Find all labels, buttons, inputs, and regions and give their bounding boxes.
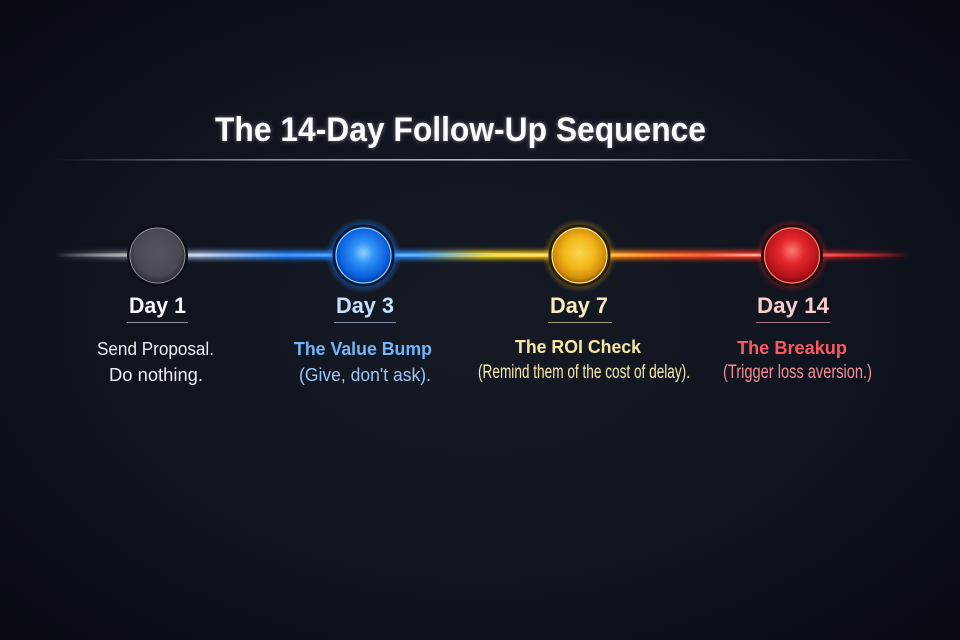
description: day 3 <box>294 339 432 385</box>
label: day 7: Day 7 <box>550 293 608 318</box>
column: day 1 <box>97 293 214 385</box>
description: day 1 <box>97 339 214 385</box>
description: day 14: The Breakup <box>737 338 847 358</box>
title: The 14-Day Follow-Up Sequence <box>215 111 706 149</box>
label: day 3: Day 3 <box>336 293 394 318</box>
underline: day 3 <box>334 322 396 323</box>
description: day 1: Do nothing. <box>109 365 203 385</box>
title rule <box>55 159 915 161</box>
node: day 1 <box>127 225 188 286</box>
underline: day 1 <box>127 322 188 323</box>
description: day 7: (Remind them of the cost of delay). <box>478 362 690 383</box>
description: day 3: (Give, don't ask). <box>299 365 431 385</box>
description: day 7: The ROI Check <box>515 337 642 357</box>
node: day 14 <box>755 218 829 292</box>
node: day 3 <box>326 218 402 294</box>
title: The 14-Day Follow-Up Sequence <box>215 111 706 149</box>
description: day 7 <box>478 337 690 383</box>
description: day 14: (Trigger loss aversion.) <box>723 362 872 383</box>
label: day 1: Day 1 <box>129 293 186 318</box>
column: day 14 <box>723 293 872 383</box>
node: day 7 <box>542 218 616 292</box>
column: day 7 <box>478 293 690 383</box>
description: day 14 <box>723 338 872 383</box>
description: day 3: The Value Bump <box>294 339 432 359</box>
description: day 1: Send Proposal. <box>97 339 214 359</box>
underline: day 7 <box>548 322 612 323</box>
timeline line <box>55 251 910 259</box>
underline: day 14 <box>756 322 830 323</box>
label: day 14: Day 14 <box>757 293 830 318</box>
column: day 3 <box>294 293 432 385</box>
